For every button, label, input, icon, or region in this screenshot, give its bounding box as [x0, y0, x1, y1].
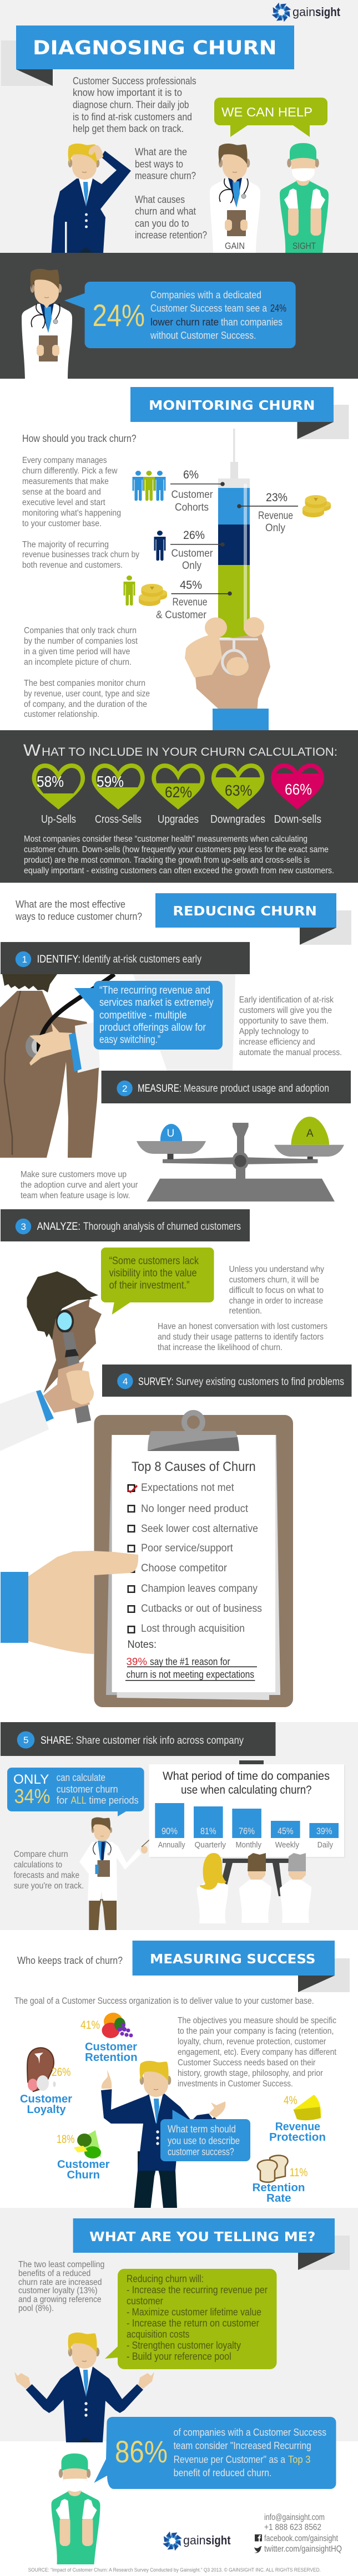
- banner: reducing churn: [155, 893, 351, 945]
- figure: presenting doctor: [79, 1818, 160, 1930]
- section background: monitoring: [0, 379, 358, 730]
- item: customer churn 18%: Customer: [57, 2158, 110, 2171]
- bar chart: period of time: Weekly: [275, 1840, 299, 1850]
- callout: 24 percent: without Customer Success.: [150, 329, 256, 341]
- quote bubble: recurring revenue: competitive - multiple: [99, 1010, 186, 1021]
- section background: telling: [0, 2208, 358, 2441]
- callout: 24 percent: Customer Success team see a: [150, 302, 268, 314]
- question text: What are the: [135, 146, 187, 157]
- checklist: [128, 1482, 262, 1635]
- item: customer retention 41%: [80, 2013, 138, 2064]
- notes: say the #1 reason for: [150, 1656, 230, 1667]
- intro text: [73, 75, 196, 134]
- board stand: [220, 1760, 289, 1896]
- figure: patient back with stethoscope: [0, 974, 114, 1158]
- text: objectives: history, growth stage, philosophy, and prior: [178, 2069, 323, 2078]
- question text: What causes: [135, 194, 185, 205]
- label: customer only 26%: 26%: [183, 529, 205, 542]
- figure: doctor gain: [210, 144, 260, 254]
- heading: what to include: HAT TO INCLUDE IN YOUR CHURN CALCULATION:: [42, 746, 337, 758]
- heading: what to include: [23, 741, 337, 760]
- step bar: analyze: [1, 1209, 250, 1241]
- banner: what are you telling me: WHAT ARE YOU TELLING ME?: [89, 2229, 315, 2244]
- item: customer loyalty 26%: Loyalty: [27, 2104, 66, 2116]
- banner: measuring success: MEASURING SUCCESS: [150, 1951, 315, 1967]
- step bar: identify: 1: [22, 954, 27, 965]
- text: least compelling benefits: pool (8%).: [18, 2304, 54, 2313]
- contact details: [254, 2513, 342, 2554]
- intro text: diagnose churn. Their daily job: [73, 99, 189, 110]
- speech bubble: reducing churn will: Reducing churn will:: [127, 2273, 204, 2284]
- heart: downgrades 63%: Downgrades: [210, 813, 265, 826]
- heart: cross-sells 59%: [92, 763, 145, 826]
- speech bubble: reducing churn will: customer: [127, 2295, 163, 2307]
- heart: cross-sells 59%: Cross-Sells: [95, 813, 142, 826]
- text: least compelling benefits: customer loyalty (13%): [18, 2286, 98, 2295]
- label: customer cohorts 6%: Customer: [171, 489, 213, 501]
- item: customer retention 41%: Customer: [85, 2041, 137, 2053]
- banner: reducing churn: REDUCING CHURN: [173, 903, 317, 919]
- speech bubble: reducing churn will: - Strengthen customer loyalty: [127, 2340, 241, 2351]
- text: early identification: automate the manual process.: [239, 1048, 342, 1057]
- section background: diagnosing: [0, 0, 358, 253]
- question text: measure churn?: [135, 170, 196, 181]
- heart: upgrades 62%: 62%: [165, 783, 192, 801]
- callout: only 34 percent: for: [57, 1795, 68, 1806]
- text: every company: Every company manages: [22, 456, 107, 465]
- icon: doctor: [22, 269, 72, 379]
- item: customer retention 41%: Retention: [85, 2051, 138, 2064]
- callout: only 34 percent: time periods: [89, 1795, 139, 1806]
- step bar: identify: [1, 942, 250, 974]
- text: customer health: Most companies consider these “customer health” measurements when calculating: [24, 834, 307, 844]
- figure: surgeon sight: SIGHT: [293, 241, 316, 251]
- speech bubble: reducing churn will: acquisition costs: [127, 2329, 189, 2340]
- step bar: survey: [102, 1365, 352, 1397]
- chart title: use when calculating churn?: [181, 1784, 312, 1796]
- text: every company: The majority of recurring: [22, 540, 109, 549]
- source footnote: SOURCE: “Impact of Customer Churn: A Research Survey Conducted by Gainsight.” Q3 2013. © GAINSIGHT INC. ALL RIGHTS RESERVED.: [28, 2567, 321, 2573]
- bar chart: period of time: [149, 1764, 345, 1858]
- speech bubble: reducing churn will: - Build your reference pool: [127, 2351, 231, 2362]
- item: customer churn 18%: Churn: [67, 2169, 100, 2181]
- bar chart: period of time: 76%: [239, 1826, 255, 1836]
- text: least compelling benefits: churn rate are increased: [18, 2278, 102, 2287]
- text: every company: churn differently. Pick a few: [22, 466, 118, 476]
- text: incomplete picture: by the number of companies lost: [24, 637, 138, 646]
- text: objectives: loyalty, churn, revenue protection, customer: [178, 2037, 326, 2046]
- banner: monitoring churn: [130, 387, 349, 439]
- callout: 86 percent: benefit of reduced churn.: [174, 2467, 272, 2478]
- text: incomplete picture: by revenue, user count, type and size: [24, 689, 150, 699]
- speech bubble: what term: you use to describe: [168, 2135, 240, 2146]
- question text: churn and what: [135, 206, 196, 217]
- logo: gainsight footer: gain: [183, 2533, 205, 2547]
- label: customer cohorts 6%: [132, 469, 225, 513]
- step bar: share: Share customer risk info across company: [76, 1735, 244, 1747]
- text: objectives: to the pain your company is facing (retention,: [178, 2027, 334, 2036]
- question text: can you do to: [135, 218, 189, 229]
- quote bubble: recurring revenue: product offerings allow for: [99, 1022, 206, 1034]
- logo: gainsight header: [272, 3, 341, 22]
- label: customer cohorts 6%: Cohorts: [175, 502, 209, 513]
- text: every company: measurements that make: [22, 477, 109, 486]
- text: honest conversation: that increase the likelihood of churn.: [158, 1343, 283, 1352]
- step bar: measure: MEASURE:: [138, 1083, 181, 1094]
- callout: 86 percent: Top 3: [288, 2453, 310, 2465]
- speech bubble: reducing churn will: - Increase the return on customer: [127, 2318, 259, 2329]
- step bar: share: [1, 1722, 275, 1756]
- checklist: Expectations not met: [141, 1482, 234, 1494]
- text: adoption curve: the adoption curve and alert your: [21, 1180, 138, 1190]
- title banner: diagnosing churn: DIAGNOSING CHURN: [33, 37, 276, 59]
- heart: down-sells 66%: 66%: [285, 781, 312, 798]
- figure: patient head with otoscope: [0, 1271, 102, 1451]
- logo: gainsight footer: [163, 2532, 231, 2550]
- panel: 24 percent stat: [0, 253, 358, 379]
- bar chart: period of time: Daily: [317, 1840, 333, 1850]
- quote bubble: visibility: of their investment.”: [109, 1280, 190, 1291]
- label: revenue only 23%: [237, 491, 331, 534]
- label: revenue and customer 45%: 45%: [180, 579, 202, 592]
- text: objectives: Customer Success needs based on their: [178, 2058, 315, 2068]
- text: understand why: change in order to increase: [229, 1296, 323, 1306]
- text: incomplete picture: customer relationship.: [24, 710, 99, 719]
- item: retention rate 11%: [252, 2155, 307, 2205]
- step bar: analyze: 3: [21, 1221, 26, 1232]
- text: adoption curve: Make sure customers move up: [21, 1170, 127, 1179]
- text: every company: both revenue and customers.: [22, 561, 123, 570]
- intro text: know how important it is to: [73, 87, 182, 98]
- label: revenue and customer 45%: [123, 576, 232, 621]
- text: least compelling benefits: [18, 2260, 104, 2313]
- text: every company: [22, 456, 139, 570]
- text: least compelling benefits: and a growing reference: [18, 2295, 102, 2304]
- heart: downgrades 63%: [210, 763, 265, 826]
- text: least compelling benefits: The two least compelling: [18, 2260, 104, 2269]
- icon: usage weight: U: [167, 1128, 174, 1139]
- label: revenue only 23%: Revenue: [258, 510, 293, 522]
- text: compare churn: sure you're on track.: [14, 1881, 84, 1891]
- callout: only 34 percent: ALL: [71, 1795, 87, 1806]
- item: revenue protection 4%: 4%: [284, 2094, 298, 2107]
- speech bubble: what term: What term should: [168, 2124, 236, 2135]
- text: incomplete picture: an incomplete picture of churn.: [24, 658, 132, 667]
- text: customer health: [24, 834, 334, 875]
- text: understand why: difficult to focus on what to: [229, 1286, 324, 1295]
- notes: Notes:: [128, 1639, 157, 1651]
- checklist: Poor service/support: [141, 1542, 233, 1554]
- callout: 24 percent: lower churn rate: [150, 316, 219, 328]
- step bar: share: 5: [23, 1735, 28, 1745]
- text: honest conversation: and study their usage patterns to identify factors: [158, 1332, 324, 1342]
- label: customer only 26%: Customer: [171, 548, 213, 559]
- label: revenue only 23%: Only: [265, 522, 285, 534]
- banner: monitoring churn: MONITORING CHURN: [149, 398, 315, 413]
- logo: gainsight footer: sight: [205, 2533, 231, 2547]
- bar chart: period of time: Annually: [158, 1840, 185, 1850]
- callout: 24 percent: Companies with a dedicated: [150, 289, 261, 301]
- step bar: identify: Identify at-risk customers early: [82, 954, 201, 965]
- intro text: help get them back on track.: [73, 123, 184, 134]
- icon: facebook: [255, 2534, 262, 2542]
- step bar: identify: IDENTIFY:: [37, 954, 80, 965]
- figure: audience: [197, 1853, 311, 1923]
- heart: up-sells 58%: Up-Sells: [41, 813, 76, 826]
- intro text: Customer Success professionals: [73, 75, 196, 86]
- speech bubble: what term: [160, 2110, 250, 2161]
- heart: cross-sells 59%: 59%: [97, 773, 124, 790]
- speech bubble: we can help: [214, 98, 327, 137]
- text: understand why: [229, 1265, 324, 1316]
- label: revenue and customer 45%: & Customer: [156, 609, 207, 621]
- item: customer retention 41%: 41%: [80, 2019, 100, 2032]
- figure: surgeon sight: [280, 143, 329, 254]
- quote bubble: recurring revenue: services market is extremely: [99, 997, 214, 1009]
- text: objectives: engagement, etc). Every company has different: [178, 2048, 337, 2057]
- item: revenue protection 4%: Protection: [269, 2131, 326, 2144]
- item: retention rate 11%: Rate: [266, 2192, 291, 2205]
- text: early identification: opportunity to save them.: [239, 1016, 329, 1026]
- text: compare churn: Compare churn: [14, 1850, 68, 1859]
- question text: increase retention?: [135, 230, 207, 241]
- item: customer loyalty 26%: 26%: [52, 2066, 71, 2079]
- item: revenue protection 4%: Revenue: [275, 2121, 320, 2133]
- text: customer health: product) are the most common. Tracking the growth from up-sells and cross-sells is: [24, 856, 310, 865]
- text: honest conversation: Have an honest conversation with lost customers: [158, 1322, 327, 1331]
- checklist: Cutbacks or out of business: [141, 1603, 262, 1615]
- callout: 24 percent: [64, 282, 296, 348]
- text: incomplete picture: in a given time period will have: [24, 647, 130, 656]
- callout: only 34 percent: customer churn: [57, 1784, 118, 1795]
- step bar: share: SHARE:: [41, 1735, 73, 1747]
- checklist: No longer need product: [141, 1503, 249, 1515]
- text: every company: revenue businesses track churn by: [22, 550, 139, 559]
- figure: surgeon footer: [51, 2453, 100, 2564]
- callout: 86 percent: 86%: [115, 2434, 168, 2469]
- checklist: Champion leaves company: [141, 1583, 258, 1595]
- heart: up-sells 58%: [32, 763, 85, 826]
- item: customer loyalty 26%: [20, 2048, 72, 2116]
- banner: what are you telling me: [73, 2218, 350, 2270]
- figure: doctor gain: GAIN: [225, 241, 245, 251]
- quote bubble: visibility: “Some customers lack: [109, 1255, 199, 1267]
- item: retention rate 11%: Retention: [252, 2182, 305, 2194]
- callout: only 34 percent: ONLY: [13, 1772, 49, 1787]
- bar chart: period of time: 45%: [278, 1826, 294, 1836]
- heart: down-sells 66%: Down-sells: [274, 813, 321, 826]
- question: who keeps track: Who keeps track of churn?: [17, 1955, 123, 1966]
- text: compare churn: calculations to: [14, 1860, 62, 1870]
- contact details: info@gainsight.com: [264, 2513, 325, 2522]
- speech bubble: we can help: WE CAN HELP: [221, 105, 312, 119]
- intro text: is to find at-risk customers and: [73, 111, 192, 123]
- text: understand why: customers churn, it will be: [229, 1275, 319, 1285]
- heading: how should you track churn: How should you track churn?: [22, 433, 137, 444]
- text: objectives: The objectives you measure should be specific: [178, 2016, 336, 2025]
- label: customer cohorts 6%: 6%: [183, 469, 199, 481]
- text: adoption curve: team when feature usage is low.: [21, 1191, 130, 1200]
- heart: down-sells 66%: [271, 763, 324, 826]
- bar chart: period of time: Quarterly: [194, 1840, 226, 1850]
- text: every company: monitoring what's happening: [22, 508, 121, 518]
- text: early identification: Early identification of at-risk: [239, 995, 334, 1005]
- text: compare churn: forecasts and make: [14, 1871, 79, 1880]
- chart title: [163, 1770, 330, 1796]
- clipboard: top 8 causes of churn: [94, 1413, 293, 1707]
- checklist: Seek lower cost alternative: [141, 1523, 258, 1535]
- item: retention rate 11%: 11%: [290, 2166, 307, 2179]
- panel: what to include in churn calculation: [0, 730, 358, 883]
- logo: gainsight header: sight: [315, 5, 341, 19]
- callout: 86 percent: team consider "Increased Recurring: [174, 2440, 311, 2451]
- text: objectives: investments in Customer Success.: [178, 2079, 293, 2089]
- bar chart: period of time: 90%: [162, 1826, 178, 1836]
- text: compare churn: [14, 1850, 84, 1891]
- text: understand why: retention.: [229, 1306, 262, 1316]
- callout: only 34 percent: 34%: [14, 1785, 50, 1808]
- step bar: survey: 4: [123, 1376, 128, 1387]
- step bar: analyze: ANALYZE:: [37, 1221, 80, 1233]
- text: understand why: Unless you understand why: [229, 1265, 324, 1274]
- text: early identification: Apply technology to: [239, 1027, 309, 1036]
- chart: syringe of tracking methods: [185, 429, 270, 730]
- text: early identification: increase efficiency and: [239, 1037, 315, 1047]
- speech bubble: reducing churn will: - Increase the recurring revenue per: [127, 2284, 268, 2295]
- label: revenue and customer 45%: Revenue: [172, 597, 208, 608]
- banner: measuring success: [133, 1941, 350, 1992]
- heart: upgrades 62%: Upgrades: [158, 813, 199, 826]
- text: early identification: [239, 995, 342, 1057]
- notes: 39%: [127, 1656, 147, 1667]
- callout: 86 percent: of companies with a Customer Success: [174, 2426, 326, 2438]
- chart title: What period of time do companies: [163, 1770, 330, 1783]
- text: honest conversation: [158, 1322, 327, 1352]
- quote bubble: visibility: visibility into the value: [109, 1267, 197, 1279]
- step bar: analyze: Thorough analysis of churned customers: [83, 1221, 241, 1233]
- callout: 86 percent: [94, 2417, 336, 2489]
- contact details: facebook.com/gainsight: [264, 2534, 339, 2543]
- icon: usage weight: [160, 1124, 182, 1141]
- label: customer only 26%: [154, 529, 225, 572]
- heading: what to include: W: [23, 741, 41, 760]
- callout: 24 percent: 24%: [92, 298, 145, 333]
- heart: up-sells 58%: 58%: [37, 773, 64, 790]
- text: customer health: equally important - existing customers can often exceed the growth from new customers.: [24, 866, 334, 875]
- text: incomplete picture: [24, 626, 150, 719]
- text: early identification: customers will give you the: [239, 1006, 332, 1015]
- checklist: Lost through acquisition: [141, 1623, 245, 1635]
- quote bubble: recurring revenue: [74, 981, 223, 1050]
- logo: gainsight header: gain: [293, 5, 315, 19]
- contact details: +1 888 623 8562: [264, 2523, 321, 2532]
- callout: only 34 percent: [7, 1768, 144, 1816]
- label: revenue only 23%: 23%: [266, 491, 288, 504]
- quote bubble: recurring revenue: easy switching.”: [99, 1034, 160, 1046]
- hand holding clipboard: [1, 1551, 138, 1654]
- notes: churn is not meeting expectations: [127, 1669, 254, 1680]
- speech bubble: reducing churn will: [105, 2269, 276, 2369]
- heading: top 8 causes: Top 8 Causes of Churn: [132, 1459, 256, 1474]
- callout: only 34 percent: can calculate: [57, 1772, 105, 1783]
- item: customer churn 18%: 18%: [57, 2133, 74, 2146]
- question text: best ways to: [135, 159, 183, 170]
- figure: businessman arms raised: [14, 2333, 154, 2442]
- speech bubble: what term: customer success?: [168, 2146, 234, 2157]
- icon: adoption weight: A: [306, 1128, 314, 1139]
- text: incomplete picture: of company, and the duration of the: [24, 700, 147, 709]
- text: objectives: [178, 2016, 337, 2089]
- callout: 24 percent: 24%: [270, 302, 286, 314]
- bar chart: period of time: 81%: [200, 1826, 216, 1836]
- question: reducing churn: ways to reduce customer churn?: [15, 911, 142, 922]
- checklist: Choose competitor: [141, 1562, 228, 1574]
- label: customer only 26%: Only: [182, 560, 201, 572]
- decorative panel behind quote: [133, 974, 235, 1071]
- callout: 86 percent: Revenue per Customer" as a: [174, 2453, 286, 2465]
- item: customer churn 18%: [57, 2130, 110, 2181]
- step bar: measure: Measure product usage and adoption: [184, 1083, 329, 1094]
- figure: confused businessman: [51, 144, 131, 253]
- figure: businessman presenting measures: [101, 2061, 225, 2208]
- callout: 24 percent: than companies: [221, 316, 283, 328]
- item: revenue protection 4%: [269, 2094, 326, 2144]
- section background: sharing: [0, 1722, 358, 1930]
- question text: [135, 146, 207, 241]
- speech bubble: reducing churn will: - Maximize customer lifetime value: [127, 2307, 261, 2318]
- contact details: twitter.com/gainsightHQ: [264, 2544, 342, 2554]
- item: customer loyalty 26%: Customer: [20, 2093, 72, 2105]
- step bar: survey: SURVEY:: [138, 1376, 174, 1388]
- icon: twitter: [254, 2546, 262, 2553]
- text: incomplete picture: The best companies monitor churn: [24, 679, 145, 688]
- bar chart: period of time: Monthly: [235, 1840, 261, 1850]
- text: incomplete picture: Companies that only track churn: [24, 626, 137, 635]
- step bar: measure: 2: [122, 1083, 127, 1094]
- title banner: diagnosing churn: [1, 26, 294, 86]
- heart: downgrades 63%: 63%: [225, 782, 252, 799]
- notes: [125, 1639, 257, 1681]
- question: reducing churn: [15, 899, 142, 922]
- bar chart: period of time: 39%: [316, 1826, 332, 1836]
- quote bubble: recurring revenue: “The recurring revenue and: [99, 985, 210, 996]
- icon: balance scale: [137, 1117, 344, 1202]
- icon: adoption weight: [291, 1117, 329, 1145]
- step bar: measure: [102, 1071, 351, 1103]
- text: adoption curve: [21, 1170, 138, 1200]
- text: every company: executive level and start: [22, 498, 105, 507]
- question: reducing churn: What are the most effective: [16, 899, 125, 910]
- text: every company: sense at the board and: [22, 487, 101, 497]
- text: every company: to your customer base.: [22, 519, 102, 528]
- quote bubble: visibility: [101, 1248, 214, 1315]
- text: least compelling benefits: benefits of a reduced: [18, 2269, 90, 2278]
- text: customer health: customer churn. Down-sells (how frequently your customers pay less for the exact same: [24, 845, 329, 854]
- heart: upgrades 62%: [152, 763, 205, 826]
